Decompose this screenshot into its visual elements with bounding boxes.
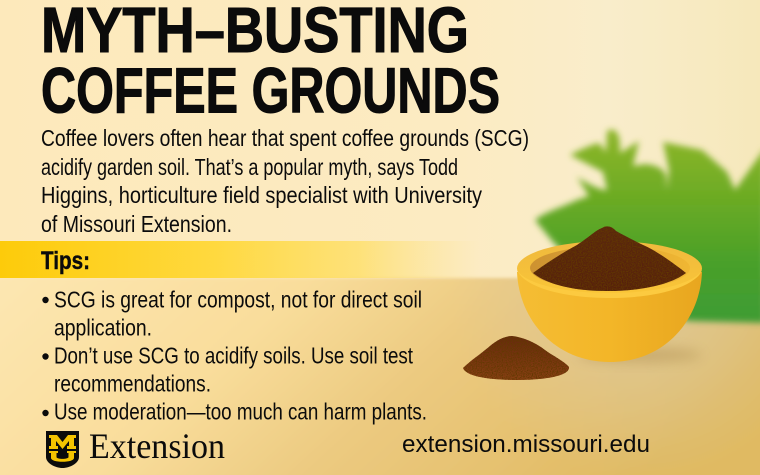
tip 2: recommendations.: [54, 370, 211, 396]
tip 2: [42, 342, 413, 396]
intro paragraph: [41, 125, 529, 237]
tip 3: Use moderation—too much can harm plants.: [54, 398, 427, 424]
tip 1: application.: [54, 314, 152, 340]
intro paragraph: Coffee lovers often hear that spent coffee grounds (SCG): [41, 125, 529, 151]
image: blurred green plant: [535, 130, 760, 323]
tip 2: Don’t use SCG to acidify soils. Use soil test: [54, 342, 413, 368]
title: [41, 0, 500, 126]
image: bowl of coffee grounds: [517, 226, 702, 363]
tips list: [42, 286, 427, 424]
image: small pile of coffee grounds: [463, 336, 569, 380]
intro paragraph: acidify garden soil. That’s a popular myth, says Todd: [41, 154, 458, 180]
tips band: [0, 241, 480, 278]
intro paragraph: of Missouri Extension.: [41, 211, 232, 237]
tip 1: [42, 286, 422, 340]
website url: extension.missouri.edu: [402, 431, 650, 458]
logo: Mizzou shield: [46, 431, 79, 468]
title: COFFEE GROUNDS: [41, 54, 500, 126]
intro paragraph: Higgins, horticulture field specialist with University: [41, 182, 482, 208]
coffee grounds in bowl: [533, 226, 686, 291]
tips heading: Tips:: [41, 247, 90, 275]
tip 1: SCG is great for compost, not for direct soil: [54, 286, 422, 312]
logo wordmark: Extension: Extension: [89, 426, 225, 466]
